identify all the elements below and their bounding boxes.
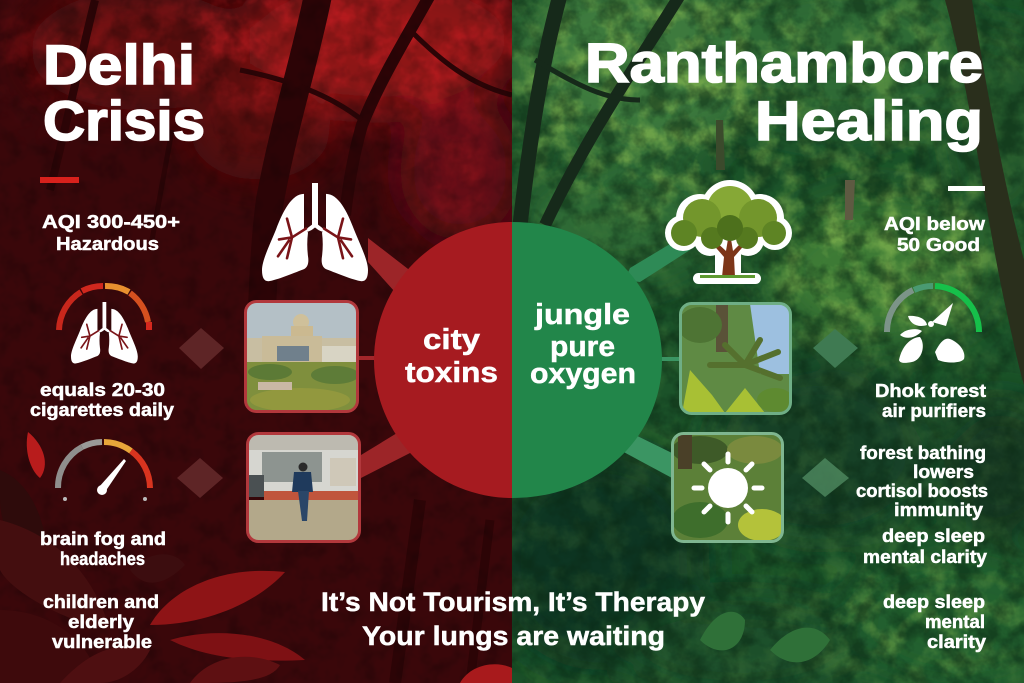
text: AQI Delhi: AQI 300-450+: [42, 212, 180, 232]
icon: speed gauge: [58, 442, 150, 501]
icon: tree: [665, 180, 792, 284]
tagline: It’s Not Tourism, It’s Therapy: [321, 587, 705, 617]
text: brain fog: headaches: [60, 549, 145, 569]
text: AQI Delhi: [42, 212, 180, 254]
photo: city skyline: [246, 302, 359, 412]
icon: large lungs: [262, 183, 368, 281]
text: jungle pure oxygen: jungle: [534, 299, 630, 331]
text: city toxins: city: [423, 324, 480, 356]
icon: lung AQI gauge: [59, 286, 152, 363]
arrow: diamond left bottom: [177, 458, 223, 498]
canopy: [671, 186, 786, 249]
title: Delhi Crisis: Crisis: [43, 89, 205, 152]
text: forest bathing: [856, 443, 988, 520]
connector: lungs to circle: [368, 238, 412, 292]
arrow: diamond right bottom: [802, 458, 849, 497]
text: Dhok forest: Dhok forest: [875, 381, 986, 401]
trunk: [710, 239, 748, 277]
text: jungle pure oxygen: [530, 299, 636, 390]
left half: city toxins: [374, 222, 512, 498]
text: vulnerable groups: children and: [43, 592, 159, 612]
text: brain fog: [40, 529, 166, 569]
text: deep sleep 2: deep sleep: [883, 592, 985, 612]
title: Delhi Crisis: Delhi: [43, 33, 195, 96]
right half: jungle oxygen: [512, 222, 662, 498]
text: vulnerable groups: elderly: [68, 612, 134, 632]
background: Delhi red forest: [0, 0, 520, 683]
text: brain fog: brain fog and: [40, 529, 166, 549]
text: deep sleep 1: mental clarity: [863, 547, 987, 567]
photo: man on street: [248, 434, 360, 542]
text: deep sleep 1: [863, 526, 987, 567]
connector: tree to circle: [625, 238, 690, 282]
connector: street photo to circle: [361, 430, 412, 478]
sun icon: [694, 454, 762, 522]
text: deep sleep 2: clarity: [927, 632, 986, 652]
icon: leaf gauge: [887, 286, 979, 363]
arrow: diamond left top: [179, 328, 224, 369]
tagline: Your lungs are waiting: [362, 621, 665, 651]
text: AQI Delhi: Hazardous: [56, 234, 159, 254]
tagline: [321, 587, 705, 651]
text: forest bathing: cortisol boosts: [856, 481, 988, 501]
photo: palm forest: [678, 304, 793, 414]
photo: sun over forest: [672, 434, 786, 542]
text: city toxins: [405, 324, 498, 389]
tree outline: [665, 180, 792, 284]
text: jungle pure oxygen: oxygen: [530, 358, 636, 390]
accent bar: red: [40, 177, 79, 183]
text: cigarettes: [30, 380, 174, 420]
connector: sun photo to circle: [620, 430, 672, 478]
text: deep sleep 2: mental: [925, 612, 985, 632]
accent bar: white: [948, 186, 985, 191]
text: deep sleep 1: deep sleep: [882, 526, 985, 546]
text: forest bathing: forest bathing: [860, 443, 986, 463]
text: cigarettes: equals 20-30: [40, 380, 165, 400]
title: Delhi Crisis: [43, 33, 205, 152]
text: AQI Ranthambore: AQI below: [884, 214, 986, 234]
text: jungle pure oxygen: pure: [550, 331, 615, 363]
text: deep sleep 2: [883, 592, 986, 652]
text: forest bathing: immunity: [894, 500, 983, 520]
text: AQI Ranthambore: 50 Good: [897, 235, 980, 255]
text: Dhok forest: [875, 381, 986, 421]
text: vulnerable groups: vulnerable: [52, 632, 152, 652]
connector: city photo to circle: [358, 356, 380, 360]
centre dividing circle: [374, 222, 662, 498]
text: cigarettes: cigarettes daily: [30, 400, 174, 420]
foreground red leaves: [0, 432, 512, 683]
text: city toxins: toxins: [405, 357, 498, 389]
title: Ranthambore Healing: [585, 31, 983, 152]
text: Dhok forest: air purifiers: [882, 401, 986, 421]
man figure: [292, 462, 313, 521]
title: Ranthambore Healing: Ranthambore: [585, 31, 983, 94]
arrow: diamond right top: [813, 329, 858, 368]
connector: forest photo to circle: [658, 357, 682, 361]
text: AQI Ranthambore: [884, 214, 986, 255]
text: vulnerable groups: [43, 592, 159, 652]
title: Ranthambore Healing: Healing: [755, 89, 983, 152]
background: Ranthambore green forest: [490, 0, 1024, 683]
text: forest bathing: lowers: [913, 462, 974, 482]
